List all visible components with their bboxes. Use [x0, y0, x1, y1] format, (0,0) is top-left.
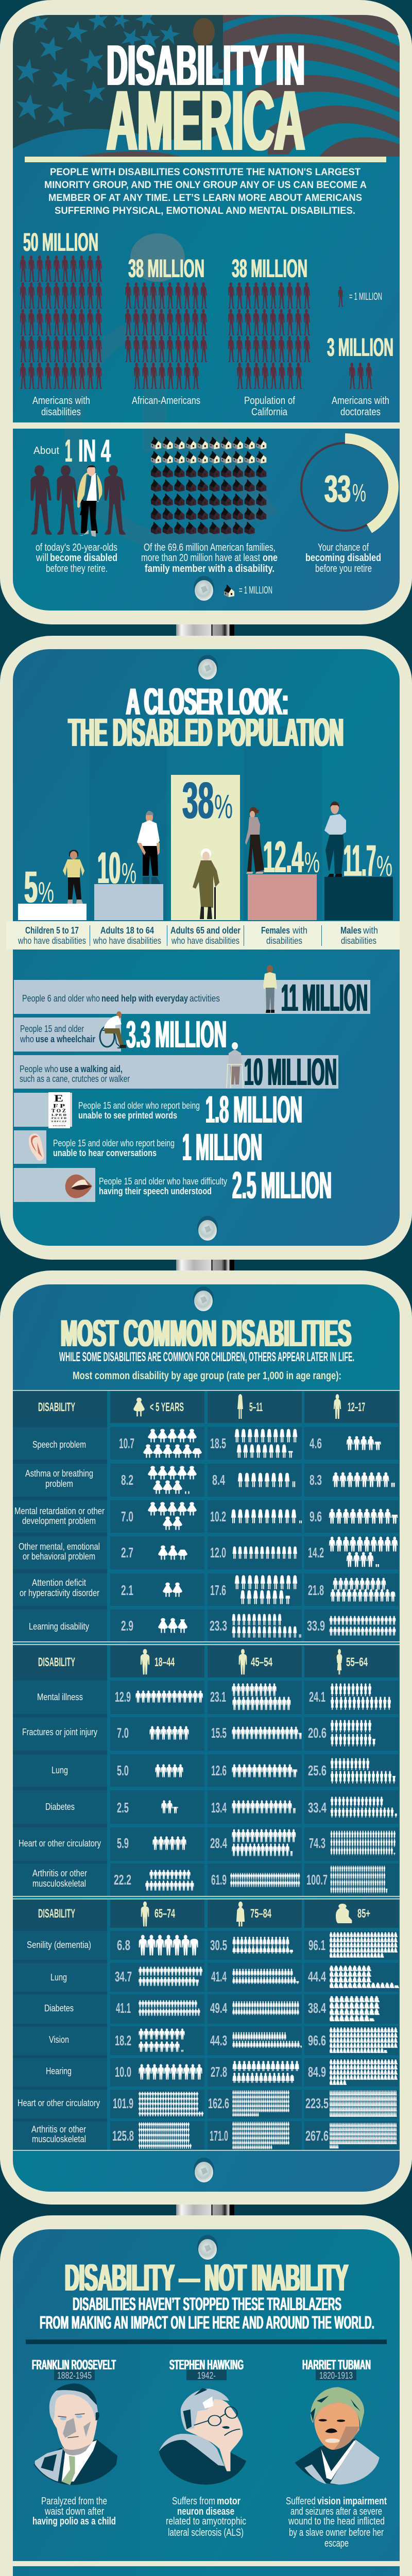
profile: Harriet Tubman: 1820-1913: [319, 2370, 353, 2381]
profile: Harriet Tubman: escape: [324, 2538, 349, 2549]
row: heart: 223.5: [305, 2095, 329, 2111]
header row: DISABILITY: [38, 1655, 75, 1669]
profile: Harriet Tubman: and seizures after a severe: [290, 2506, 382, 2517]
sign border: [0, 636, 412, 1260]
heading: [68, 681, 344, 755]
bar: 3.3 million use a wheelchair: [14, 1011, 227, 1056]
row: vision: [13, 2026, 399, 2055]
icon: eye chart: F E L O P Z D: [53, 1125, 66, 1127]
bar: females: 12.4: [263, 833, 303, 882]
bar: adults 18 to 64: [94, 811, 163, 920]
legend: person equals one million: [338, 286, 382, 307]
icon: eye chart: P E C F D: [52, 1117, 66, 1120]
stat: 1 in 4: IN 4: [78, 433, 111, 469]
row: asthma: 8.4: [212, 1472, 225, 1488]
row: senility: 96.1: [308, 1937, 325, 1953]
row: arthritis: 171.0: [210, 2128, 228, 2144]
portrait: [33, 2383, 117, 2485]
row: asthma: problem: [45, 1479, 73, 1489]
row: senility: 6.8: [117, 1937, 130, 1953]
heading: Most common disability by age group (rate per 1,000 in age range):: [73, 1370, 341, 1382]
panel: sign four, disability not inability: [0, 2215, 412, 2576]
chart: 33 percent ring: [301, 438, 393, 574]
table: ages under 18: [13, 1390, 400, 1641]
row: speech problem: 4.6: [310, 1435, 322, 1451]
profile: Franklin Roosevelt: waist down after: [44, 2506, 104, 2517]
icon: rivet: [194, 2158, 214, 2182]
chart: 38 million African-Americans: African-Americans: [132, 395, 200, 406]
row: learning disability: 2.9: [121, 1618, 133, 1634]
row: learning disability: [13, 1609, 399, 1641]
bar: 2.5 million difficulty being understood: [14, 1164, 332, 1207]
row: arthritis: 22.2: [114, 1872, 131, 1888]
icon: rivet: [197, 2235, 218, 2260]
header row: 65–74: [154, 1907, 175, 1921]
row: mental retardation: 9.6: [310, 1509, 322, 1524]
row: vision: 44.3: [210, 2032, 227, 2048]
row: heart: 5.9: [117, 1835, 129, 1851]
row: hearing: 84.9: [308, 2064, 326, 2080]
sign face: [13, 15, 400, 611]
chart: 38 million population of California: [227, 254, 311, 418]
row: asthma: [13, 1464, 399, 1497]
row: other mental: 2.7: [121, 1545, 133, 1561]
axis labels: [6, 921, 400, 950]
bar: females: [245, 807, 320, 920]
panel: sign two, a closer look: 1 MILLION: [182, 1126, 262, 1168]
bar: 1 million unable to hear conversations: unable to hear conversations: [53, 1148, 157, 1158]
row: hearing: 10.0: [115, 2064, 131, 2080]
bar: 1.8 million unable to see printed words: unable to see printed words: [78, 1110, 177, 1121]
bar: adults 18 to 64: %: [122, 857, 136, 890]
row: fractures: [13, 1717, 399, 1751]
icon: highlighted man: [77, 465, 102, 537]
column shading: [140, 2345, 271, 2576]
bar: adults 18 to 64: 10: [97, 843, 121, 893]
profile: Stephen Hawking: neuron disease: [177, 2506, 234, 2517]
bar: adults 65 and older: 38: [182, 772, 214, 829]
row: heart: 101.9: [113, 2095, 133, 2111]
row: asthma: 8.3: [310, 1472, 322, 1488]
intro text: MINORITY GROUP, AND THE ONLY GROUP ANY OF US CAN BECOME A: [44, 179, 367, 191]
axis labels: with: [292, 925, 307, 936]
row: lung: 44.4: [308, 1969, 326, 1985]
profile: Franklin Roosevelt: [32, 2357, 117, 2527]
heading: [40, 2257, 374, 2333]
row: other mental: Other mental, emotional: [19, 1541, 100, 1552]
row: asthma: Asthma or breathing: [25, 1468, 93, 1479]
row: arthritis: 267.6: [305, 2128, 329, 2144]
row: speech problem: Speech problem: [32, 1439, 86, 1450]
row: lung: 12.6: [211, 1762, 227, 1778]
row: arthritis: [13, 2121, 399, 2150]
row: heart: 162.6: [208, 2095, 229, 2111]
row: senility: Senility (dementia): [27, 1940, 91, 1950]
row: diabetes: Diabetes: [45, 1802, 75, 1812]
row: other mental: or behavioral problem: [23, 1551, 95, 1562]
icon: eye chart: E: [54, 1093, 63, 1104]
axis labels: disabilities: [266, 936, 302, 946]
row: diabetes: 38.4: [308, 2000, 326, 2016]
row: diabetes: 49.4: [210, 2000, 227, 2016]
bar: 10 million use a walking aid: People who: [20, 1064, 58, 1074]
panel: sign one, overview: [0, 0, 412, 624]
row: diabetes: 13.4: [211, 1800, 227, 1816]
row: heart: [13, 2090, 399, 2119]
row: arthritis: Arthritis or other: [32, 1868, 87, 1878]
header row: [13, 1646, 399, 1677]
bar: females: %: [304, 846, 320, 879]
row: mental illness: 12.9: [115, 1689, 131, 1705]
row: vision: 96.6: [308, 2032, 326, 2048]
row: arthritis: 61.9: [211, 1872, 227, 1888]
row: lung: [13, 1963, 399, 1992]
profile: Stephen Hawking: Suffers from: [172, 2496, 215, 2507]
axis labels: Females: [261, 925, 290, 936]
axis labels: with: [363, 925, 378, 936]
row: other mental: [13, 1536, 399, 1569]
row: mental retardation: development problem: [22, 1516, 96, 1526]
row: fractures: 7.0: [117, 1725, 129, 1741]
chart: families with a disabled member: one: [263, 552, 278, 564]
intro text: [44, 166, 367, 216]
bar: 1 million unable to hear conversations: [14, 1126, 262, 1168]
legend: person equals one million: = 1 MILLION: [349, 291, 382, 302]
row: fractures: 15.5: [211, 1725, 227, 1741]
table: ages 65 and up: [13, 1900, 400, 2150]
row: diabetes: [13, 1994, 399, 2024]
intro text: SUFFERING PHYSICAL, EMOTIONAL AND MENTAL DISABILITIES.: [55, 205, 355, 216]
bar: 3.3 million use a wheelchair: who: [20, 1034, 34, 1044]
row: learning disability: Learning disability: [29, 1621, 89, 1632]
row: heart: Heart or other circulatory: [18, 2098, 100, 2108]
portrait: [159, 2388, 246, 2485]
intro text: MEMBER OF AT ANY TIME. LET’S LEARN MORE ABOUT AMERICANS: [48, 192, 362, 204]
bar: 3.3 million use a wheelchair: People 15 and older: [20, 1024, 84, 1034]
row: lung: 34.7: [115, 1969, 132, 1985]
icon: mouth: [65, 1175, 92, 1198]
row: vision: Vision: [49, 2035, 69, 2045]
profile: Franklin Roosevelt: FRANKLIN ROOSEVELT: [32, 2357, 116, 2372]
bar: 10 million use a walking aid: such as a cane, crutches or walker: [20, 1074, 130, 1084]
row: attention deficit: [13, 1573, 399, 1606]
profile: Harriet Tubman: wound to the head inflicted: [288, 2516, 385, 2527]
sign border: [0, 2215, 412, 2576]
row: lung: 25.6: [308, 1762, 327, 1778]
bar: 11 million need help with everyday activities: [14, 965, 370, 1019]
sign poles: [176, 621, 234, 2576]
profile: Franklin Roosevelt: having polio as a child: [32, 2516, 116, 2527]
profile: Harriet Tubman: [286, 2357, 387, 2549]
icon: eye chart: E D F C Z P: [52, 1120, 66, 1123]
row: hearing: [13, 2058, 399, 2087]
bar: 1.8 million unable to see printed words: [14, 1088, 302, 1131]
sign border: [0, 0, 412, 624]
chart: 50 million Americans with disabilities: Americans with: [32, 395, 90, 406]
sign face: [13, 1284, 400, 2192]
chart: 38 million population of California: California: [251, 406, 288, 418]
row: lung: 41.4: [211, 1969, 227, 1985]
row: mental illness: 24.1: [309, 1689, 325, 1705]
bar: 1.8 million unable to see printed words: People 15 and older who report being: [78, 1100, 200, 1111]
bar: 11 million need help with everyday activities: People 6 and older who: [22, 993, 100, 1004]
row: senility: 30.5: [210, 1937, 227, 1953]
axis labels: who have disabilities: [18, 936, 86, 946]
stat: 1 in 4: before they retire.: [46, 563, 108, 574]
legend: house equals one million: = 1 MILLION: [239, 585, 272, 596]
bar: 3.3 million use a wheelchair: use a wheelchair: [36, 1034, 95, 1044]
bar: males: [324, 802, 393, 920]
bar: adults 65 and older: %: [214, 787, 233, 825]
intro text: PEOPLE WITH DISABILITIES CONSTITUTE THE NATION'S LARGEST: [50, 166, 360, 178]
icon: eye chart: [48, 1092, 72, 1128]
sign face: [13, 649, 400, 1246]
icon: silhouettes: [30, 465, 126, 535]
chart: families with a disabled member: [141, 436, 278, 574]
icon: rivet: [197, 1216, 218, 1241]
row: senility: [13, 1931, 399, 1960]
row: diabetes: [13, 1790, 399, 1824]
header row: < 5 YEARS: [150, 1400, 184, 1414]
column shading: [90, 726, 322, 921]
faint accessibility symbol: [74, 233, 268, 543]
bar: 10 million use a walking aid: use a walking aid,: [60, 1064, 123, 1074]
row: diabetes: 41.1: [116, 2000, 131, 2016]
icon: ear: [29, 1133, 44, 1161]
row: diabetes: Diabetes: [44, 2003, 74, 2013]
profile: Stephen Hawking: [159, 2357, 246, 2538]
profile: Franklin Roosevelt: Paralyzed from the: [41, 2496, 107, 2507]
chart: 3 million Americans with doctorates: doctorates: [340, 406, 381, 418]
stat: 1 in 4: 1: [65, 433, 72, 469]
bar: children: 5: [24, 862, 38, 912]
row: fractures: 20.6: [308, 1725, 327, 1741]
row: other mental: 14.2: [308, 1545, 324, 1561]
chart: 38 million African-Americans: [124, 254, 208, 406]
icon: eye chart: T O Z: [52, 1108, 66, 1113]
panel: sign two, a closer look: [0, 636, 412, 1260]
row: attention deficit: Attention deficit: [32, 1578, 86, 1588]
axis labels: who have disabilities: [171, 936, 239, 946]
row: speech problem: 10.7: [119, 1435, 134, 1451]
row: mental retardation: 7.0: [121, 1509, 133, 1524]
row: heart: Heart or other circulatory: [19, 1838, 101, 1849]
header row: 75–84: [250, 1907, 271, 1921]
row: arthritis: musculoskeletal: [32, 2134, 86, 2144]
stat: 1 in 4: About: [33, 445, 59, 456]
heading: [59, 1313, 354, 1382]
bar: 2.5 million difficulty being understood: having their speech understood: [99, 1186, 212, 1196]
row: lung: Lung: [50, 1972, 67, 1982]
table: ages 18 to 64: [13, 1645, 400, 1896]
header row: DISABILITY: [38, 1400, 75, 1414]
profile: Stephen Hawking: 1942-: [197, 2370, 216, 2381]
row: asthma: 8.2: [121, 1472, 133, 1488]
icon: eye chart: F P: [53, 1103, 65, 1109]
bar: children: [18, 850, 87, 920]
bar: males: %: [376, 850, 392, 883]
row: learning disability: 23.3: [210, 1618, 227, 1634]
chart: 3 million Americans with doctorates: Americans with: [332, 395, 389, 406]
chart: 38 million population of California: 38 MILLION: [232, 254, 307, 283]
title: [107, 33, 305, 168]
icon: rivet: [193, 1286, 214, 1311]
stat: 1 in 4: become disabled: [50, 552, 117, 564]
bar: 11 million need help with everyday activities: activities: [190, 993, 220, 1004]
panel: sign two, a closer look: 3.3 MILLION: [126, 1013, 227, 1056]
flag pin: [193, 18, 215, 46]
chart: 38 million African-Americans: 38 MILLION: [128, 254, 204, 283]
header row: 12–17: [348, 1400, 365, 1414]
row: mental retardation: 10.2: [210, 1509, 226, 1524]
row: mental illness: 23.1: [210, 1689, 226, 1705]
row: mental retardation: [13, 1500, 399, 1533]
chart: 33 percent ring: %: [352, 480, 366, 507]
profile: Franklin Roosevelt: 1882-1945: [57, 2370, 92, 2381]
row: hearing: Hearing: [46, 2066, 72, 2076]
chart: 33 percent ring: before you retire: [315, 563, 372, 574]
profile: Stephen Hawking: related to amyotrophic: [166, 2516, 246, 2527]
row: lung: [13, 1754, 399, 1787]
profile: Stephen Hawking: STEPHEN HAWKING: [169, 2357, 244, 2372]
axis labels: disabilities: [341, 936, 376, 946]
chart: families with a disabled member: family member with a disability.: [145, 563, 274, 574]
chart: 33 percent ring: Your chance of: [318, 542, 369, 553]
row: mental retardation: Mental retardation or other: [14, 1506, 105, 1516]
row: fractures: Fractures or joint injury: [22, 1727, 97, 1737]
bar: 2.5 million difficulty being understood: People 15 and older who have difficulty: [99, 1176, 227, 1187]
chart: 33 percent ring: becoming disabled: [305, 552, 381, 564]
header row: 5–11: [249, 1400, 263, 1414]
row: hearing: 27.8: [211, 2064, 227, 2080]
row: other mental: 12.0: [210, 1545, 226, 1561]
chart: 38 million population of California: Population of: [244, 395, 295, 406]
row: arthritis: Arthritis or other: [31, 2124, 86, 2134]
row: arthritis: 100.7: [306, 1872, 328, 1888]
row: attention deficit: 2.1: [121, 1582, 133, 1598]
axis labels: who have disabilities: [93, 936, 161, 946]
header row: 55–64: [346, 1655, 368, 1669]
chart: 50 million Americans with disabilities: [19, 228, 103, 418]
sign border: [0, 1270, 412, 2205]
axis labels: Males: [340, 925, 362, 936]
row: mental illness: Mental illness: [37, 1692, 83, 1702]
row: lung: 5.0: [117, 1762, 129, 1778]
row: vision: 18.2: [115, 2032, 131, 2048]
row: attention deficit: or hyperactivity disorder: [20, 1588, 99, 1598]
row: speech problem: 18.5: [210, 1435, 226, 1451]
row: attention deficit: 21.8: [308, 1582, 324, 1598]
row: heart: 74.3: [309, 1835, 325, 1851]
portrait: [295, 2387, 380, 2485]
bar: 1 million unable to hear conversations: People 15 and older who report being: [53, 1138, 175, 1148]
axis labels: Adults 65 and older: [170, 925, 241, 936]
row: diabetes: 2.5: [117, 1800, 129, 1816]
row: learning disability: 33.9: [307, 1618, 325, 1634]
row: lung: Lung: [52, 1765, 68, 1775]
row: attention deficit: 17.6: [210, 1582, 226, 1598]
bar chart: prevalence by group: [6, 772, 400, 950]
chart: 50 million Americans with disabilities: 50 MILLION: [23, 228, 98, 257]
stat: 1 in 4: [30, 433, 126, 574]
panel: sign three, most common disabilities: [0, 1270, 412, 2205]
chart: families with a disabled member: Of the 69.6 million American families,: [144, 542, 276, 553]
profile: Stephen Hawking: lateral sclerosis (ALS): [168, 2527, 244, 2538]
bar: children: %: [38, 876, 54, 909]
row: heart: 28.4: [210, 1835, 227, 1851]
bar: 11 million need help with everyday activities: need help with everyday: [101, 993, 188, 1004]
row: arthritis: [13, 1863, 399, 1896]
profile: Stephen Hawking: motor: [217, 2496, 241, 2507]
row: arthritis: musculoskeletal: [32, 1878, 86, 1889]
chart: 33 percent ring: 33: [324, 467, 351, 510]
bar: 10 million use a walking aid: [14, 1042, 338, 1093]
header row: DISABILITY: [38, 1907, 75, 1921]
row: arthritis: 125.8: [112, 2128, 134, 2144]
header row: [13, 1391, 399, 1423]
stat: 1 in 4: will: [36, 552, 48, 564]
icon: eye chart: L P E D: [52, 1113, 66, 1117]
profile: Harriet Tubman: vision impairment: [317, 2496, 387, 2507]
header row: [13, 1900, 399, 1928]
row: speech problem: [13, 1427, 399, 1460]
row: diabetes: 33.4: [308, 1800, 327, 1816]
icon: rivet: [197, 655, 218, 680]
row: mental illness: [13, 1681, 399, 1714]
header row: 18–44: [154, 1655, 175, 1669]
chart: 3 million Americans with doctorates: [327, 333, 393, 418]
header row: 45–54: [251, 1655, 272, 1669]
axis labels: Adults 18 to 64: [100, 925, 154, 936]
bar: adults 65 and older: [171, 772, 240, 920]
axis labels: Children 5 to 17: [25, 925, 79, 936]
chart: families with a disabled member: more than 20 million have at least: [141, 552, 260, 564]
stat: 1 in 4: of today's 20-year-olds: [36, 542, 117, 553]
sign face: [13, 2229, 400, 2576]
flag artwork: [13, 0, 400, 157]
row: heart: [13, 1827, 399, 1861]
profile: Harriet Tubman: Suffered: [286, 2496, 316, 2507]
chart: 50 million Americans with disabilities: disabilities: [41, 406, 81, 418]
header row: 85+: [357, 1907, 370, 1921]
legend: house equals one million: [224, 585, 272, 597]
icon: rivet: [194, 576, 214, 601]
